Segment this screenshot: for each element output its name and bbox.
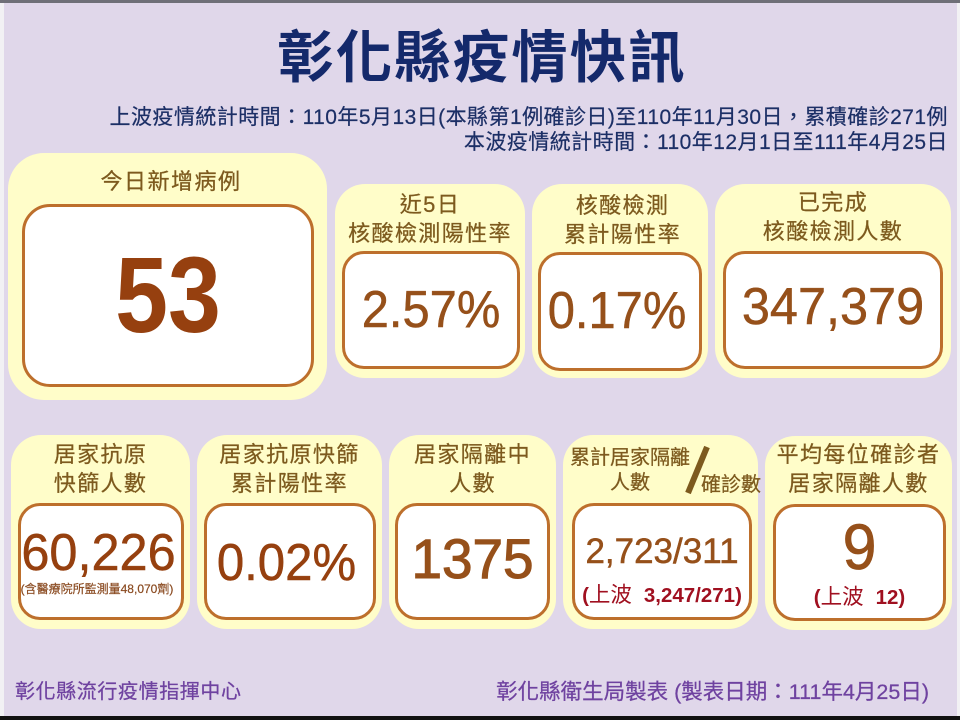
panel: 5-day PCR positivity (335, 184, 525, 378)
label: cumulative quarantine (570, 446, 690, 494)
subtitle: statistics periods (110, 106, 948, 154)
value: 1375 (411, 527, 534, 590)
label: confirmed count: 確診數 (701, 474, 761, 496)
panel: home antigen screened (11, 435, 190, 629)
label (414, 442, 531, 496)
label: 核酸檢測 (576, 193, 669, 218)
footer: command center: 彰化縣流行疫情指揮中心 (15, 681, 242, 703)
panel: average quarantined per case (765, 436, 952, 630)
label (54, 442, 147, 496)
previous wave: (上波 3,247/271) (582, 583, 742, 607)
value box (538, 252, 702, 371)
label: cumulative quarantine: 累計居家隔離 (570, 447, 690, 469)
label: 累計陽性率 (231, 471, 348, 496)
value box (572, 503, 752, 620)
value: 0.02% (217, 534, 356, 592)
footnote: (含醫療院所監測量48,070劑) (21, 582, 173, 596)
label: 居家抗原 (54, 442, 147, 467)
label (777, 442, 940, 496)
value box (773, 504, 946, 621)
label (763, 190, 903, 244)
panel: in home quarantine (389, 435, 556, 629)
label: 居家抗原快篩 (219, 442, 360, 467)
label: 已完成 (798, 190, 868, 215)
label: 居家隔離中 (414, 442, 531, 467)
icon: slash (685, 446, 710, 494)
label: 核酸檢測陽性率 (348, 221, 512, 246)
label: 近5日 (400, 192, 460, 217)
label (564, 193, 681, 247)
value: 2.57% (362, 281, 500, 339)
value: 2,723/311 (585, 532, 739, 571)
value box (342, 251, 520, 369)
panel: cumulative PCR positivity (532, 184, 708, 378)
panel: new cases today (8, 153, 327, 400)
value box (204, 503, 376, 620)
value: 9 (843, 511, 876, 583)
value box (18, 503, 184, 620)
label (219, 442, 360, 496)
label: 人數 (449, 471, 496, 496)
value: 53 (115, 234, 221, 355)
label (348, 192, 512, 246)
label: 平均每位確診者 (777, 442, 940, 467)
value: 60,226 (21, 524, 176, 582)
panel: PCR tests completed (715, 184, 951, 378)
label: 累計陽性率 (564, 222, 681, 247)
previous wave: (上波 12) (814, 585, 905, 609)
value: 0.17% (548, 282, 686, 340)
footer: made by health bureau: 彰化縣衛生局製表 (製表日期：111年4月25日) (496, 680, 929, 704)
label: cumulative quarantine: 人數 (610, 472, 650, 494)
subtitle: statistics periods: 本波疫情統計時間：110年12月1日至111年4月25日 (464, 131, 948, 154)
title: 彰化縣疫情快訊 (277, 26, 687, 89)
value box: 53 (22, 204, 314, 387)
label: 快篩人數 (54, 471, 147, 496)
label: 居家隔離人數 (788, 471, 929, 496)
panel: home antigen positivity (197, 435, 382, 629)
label: 核酸檢測人數 (763, 219, 903, 244)
label: new cases: 今日新增病例 (100, 169, 242, 194)
value box (395, 503, 550, 620)
subtitle: statistics periods: 上波疫情統計時間：110年5月13日(本縣第1例確診日)至110年11月30日，累積確診271例 (110, 106, 948, 129)
value box (723, 251, 943, 369)
panel: cumulative quarantine / confirmed (563, 435, 758, 629)
value: 347,379 (742, 278, 924, 336)
